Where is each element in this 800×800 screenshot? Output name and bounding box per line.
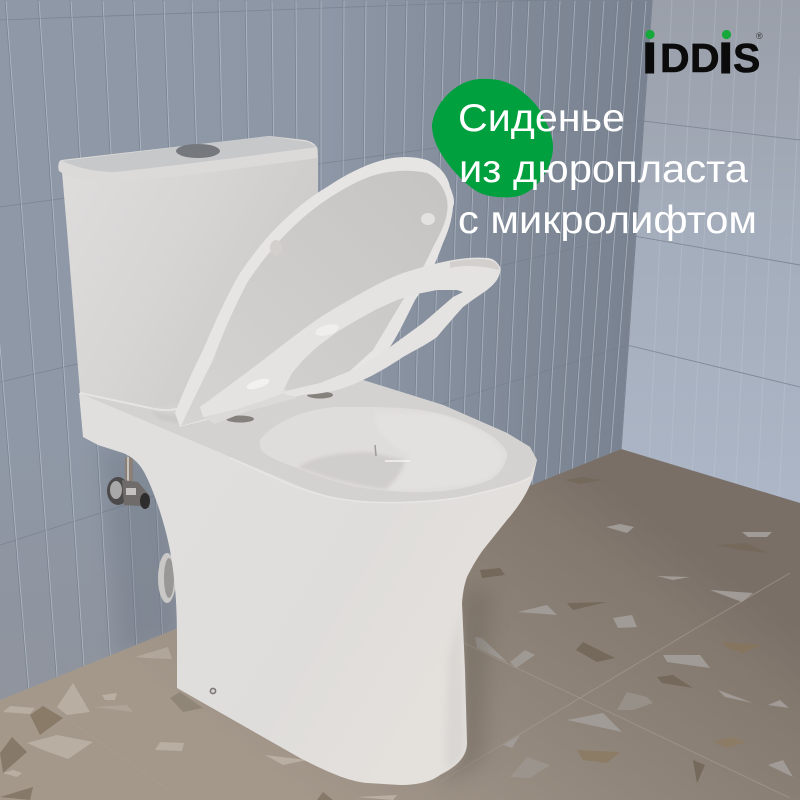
cistern lid — [58, 136, 318, 182]
floor tile joints — [440, 572, 790, 798]
hinge bolts — [226, 392, 333, 422]
lid underside — [181, 171, 448, 426]
heading — [458, 97, 757, 242]
toilet — [58, 136, 537, 785]
green blob behind heading — [432, 79, 553, 197]
seat far-end shade — [450, 259, 499, 270]
icon: angle valve — [107, 457, 150, 509]
raised seat ring — [200, 258, 500, 424]
rim front highlight — [230, 458, 530, 503]
seat bumper centre — [314, 322, 340, 338]
flush button — [176, 144, 220, 158]
terrazzo floor — [0, 449, 800, 800]
top rim surface — [79, 380, 537, 503]
wall shadow behind toilet — [98, 450, 176, 648]
lid bumper top — [421, 213, 435, 225]
flexible hose behind toilet — [158, 553, 176, 603]
hinge block under seat — [203, 389, 296, 424]
base shelf join — [80, 393, 195, 410]
drain inlet — [375, 445, 376, 456]
heading: Сиденье — [458, 97, 625, 140]
seat bumper lower — [245, 376, 271, 392]
logo: IDDIS: I — [644, 35, 655, 81]
bowl inner shade — [298, 452, 405, 489]
lid top face — [62, 136, 317, 172]
pedestal body — [79, 380, 537, 785]
pedestal shading — [445, 610, 465, 770]
light chips — [3, 647, 397, 800]
heading: с микролифтом — [458, 199, 757, 242]
logo: IDDIS: ® — [756, 31, 763, 41]
cistern tank body — [62, 155, 318, 408]
logo: IDDIS: I — [720, 35, 731, 81]
bowl opening — [260, 407, 507, 492]
heading: из дюропласта — [459, 148, 748, 191]
outlet screw — [210, 688, 216, 694]
logo: IDDIS — [644, 30, 763, 81]
logo: IDDIS: S — [733, 35, 760, 81]
bowl rear lighter area — [375, 412, 503, 489]
logo: IDDIS: D — [690, 35, 720, 81]
left tiled wall — [0, 0, 652, 688]
raised lid — [175, 157, 454, 427]
logo: IDDIS: D — [660, 35, 690, 81]
right tiled wall — [621, 0, 800, 503]
lid bumper left — [270, 240, 282, 256]
toilet floor shadow — [445, 590, 490, 785]
dark chips — [0, 477, 768, 800]
